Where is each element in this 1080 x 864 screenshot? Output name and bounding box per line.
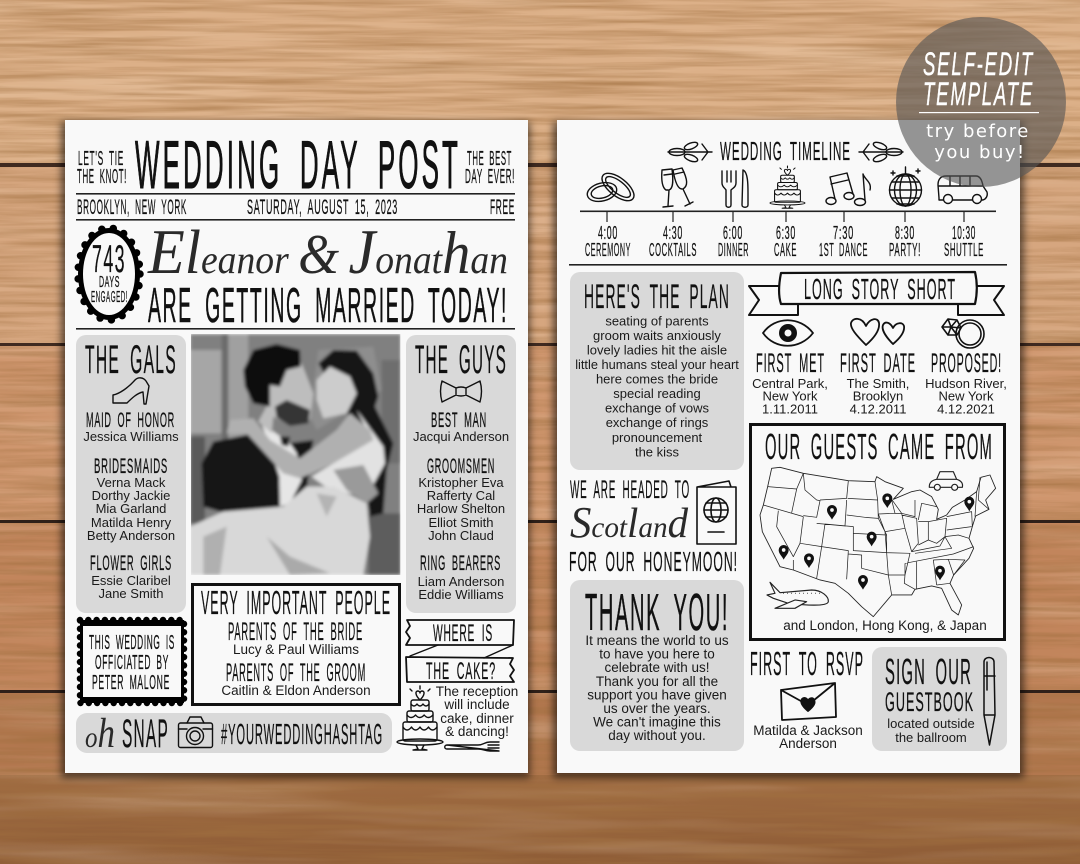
heading: wedding timeline bbox=[668, 136, 903, 166]
left card: wedding day post: THIS WEDDING IS bbox=[89, 632, 175, 654]
icon: high heel bbox=[113, 378, 149, 404]
timeline chart: 8:30 bbox=[895, 223, 915, 243]
text: reception: The reception bbox=[436, 684, 518, 699]
left card: wedding day post: PARENTS OF THE GROOM bbox=[226, 659, 366, 687]
panel: thank you: It means the world to us bbox=[585, 633, 729, 648]
panel: our guests came from bbox=[750, 424, 1004, 640]
panel: here's the plan: special reading bbox=[613, 386, 701, 401]
icon: car bbox=[929, 472, 963, 490]
banner: where is the cake: THE CAKE? bbox=[426, 658, 496, 685]
dateline: SATURDAY, AUGUST 15, 2023 bbox=[247, 196, 398, 219]
left card: wedding day post: PARENTS OF THE BRIDE bbox=[228, 618, 363, 646]
right card: timeline and story: THANK YOU! bbox=[585, 584, 729, 642]
story: first date: Brooklyn bbox=[853, 388, 903, 404]
text: THE GUYS bbox=[415, 338, 507, 382]
badge: days engaged: DAYS bbox=[99, 274, 120, 291]
story: proposed: Hudson River, bbox=[925, 376, 1007, 391]
timeline chart: 4:30 bbox=[663, 223, 683, 243]
panel: the gals: Jane Smith bbox=[98, 586, 164, 601]
right card: timeline and story bbox=[553, 120, 1024, 778]
right card: timeline and story: FOR OUR HONEYMOON! bbox=[569, 546, 738, 577]
callout: officiant: OFFICIATED BY bbox=[95, 652, 169, 674]
left card: wedding day post: MAID OF HONOR bbox=[86, 409, 175, 432]
panel: the gals: Verna Mack bbox=[97, 475, 166, 490]
heading: wedding timeline: WEDDING TIMELINE bbox=[720, 136, 851, 166]
icon: bow tie bbox=[440, 381, 482, 402]
text: reception bbox=[436, 684, 518, 739]
panel: guestbook: the ballroom bbox=[895, 730, 967, 745]
panel: the gals: BRIDESMAIDS bbox=[94, 455, 168, 478]
icon: wedding cake bbox=[397, 686, 443, 750]
story: proposed: 4.12.2021 bbox=[937, 402, 995, 416]
left card: wedding day post: #YOURWEDDINGHASHTAG bbox=[221, 719, 383, 751]
panel: very important people: Caitlin & Eldon Anderson bbox=[221, 683, 371, 698]
story: first met bbox=[752, 320, 828, 416]
masthead bbox=[77, 127, 515, 203]
pins bbox=[779, 493, 974, 590]
panel: thank you: us over the years. bbox=[603, 701, 711, 716]
panel: the gals: Matilda Henry bbox=[91, 515, 172, 530]
honeymoon text: WE ARE HEADED TO bbox=[570, 476, 690, 504]
text: reception: cake, dinner bbox=[440, 711, 514, 726]
timeline chart: SHUTTLE bbox=[944, 240, 984, 260]
left card: wedding day post bbox=[61, 120, 530, 778]
panel: the guys: Jacqui Anderson bbox=[413, 429, 509, 444]
icon: shuttle van bbox=[938, 176, 987, 204]
panel: the guys bbox=[406, 335, 516, 613]
panel: here's the plan: groom waits anxiously bbox=[593, 328, 721, 343]
panel: guestbook: located outside bbox=[887, 716, 975, 731]
story: first date: The Smith, bbox=[847, 376, 909, 391]
icon: music notes bbox=[826, 173, 870, 206]
icon: cake bbox=[770, 166, 805, 208]
badge: days engaged: 743 bbox=[92, 238, 126, 281]
panel: the guys: Elliot Smith bbox=[428, 515, 494, 530]
icon: eye bbox=[763, 320, 813, 346]
timeline chart: 7:30 bbox=[833, 223, 854, 243]
text: reception: will include bbox=[443, 697, 510, 712]
timeline chart: 4:00 bbox=[598, 223, 618, 243]
masthead: THE KNOT! bbox=[77, 166, 127, 188]
icon: airplane bbox=[767, 582, 828, 608]
panel: here's the plan: pronouncement bbox=[612, 430, 703, 445]
story: first met: Central Park, bbox=[752, 376, 828, 391]
panel: thank you: We can't imagine this bbox=[593, 715, 721, 730]
timeline chart: 1ST DANCE bbox=[819, 240, 868, 260]
honeymoon text bbox=[569, 476, 738, 577]
left card: wedding day post: VERY IMPORTANT PEOPLE bbox=[201, 584, 391, 621]
panel: here's the plan: seating of parents bbox=[605, 314, 709, 328]
panel: here's the plan: the kiss bbox=[635, 444, 680, 460]
panel: hashtag: oh bbox=[85, 711, 115, 757]
text: ARE GETTING MARRIED TODAY! bbox=[148, 279, 508, 333]
right card: timeline and story: FIRST MET bbox=[756, 348, 825, 378]
headline names: Eleanor & Jonathan bbox=[147, 216, 508, 287]
icon: camera bbox=[178, 717, 212, 748]
story: first date bbox=[840, 319, 916, 416]
badge: self-edit template bbox=[896, 17, 1066, 187]
panel: the gals: Jessica Williams bbox=[83, 429, 179, 444]
icon: passport bbox=[697, 481, 736, 544]
timeline chart: COCKTAILS bbox=[649, 240, 697, 260]
icon: champagne bbox=[662, 168, 693, 207]
panel: here's the plan: here comes the bride bbox=[596, 372, 718, 386]
panel: thank you bbox=[570, 580, 744, 751]
icon: hearts bbox=[851, 319, 904, 345]
icon: cutlery bbox=[722, 170, 748, 207]
icon: disco ball bbox=[890, 167, 922, 206]
panel: the guys: Eddie Williams bbox=[418, 587, 504, 602]
left card: wedding day post: THE BEST bbox=[467, 148, 512, 170]
dateline bbox=[77, 196, 515, 219]
banner: where is the cake: WHERE IS bbox=[433, 620, 493, 647]
panel: thank you: Thank you for all the bbox=[596, 674, 718, 689]
panel: here's the plan: exchange of vows bbox=[605, 400, 710, 416]
panel: the guys: Kristopher Eva bbox=[418, 475, 504, 490]
panel: the guys: Liam Anderson bbox=[418, 574, 504, 589]
icon: laurel right bbox=[859, 141, 903, 163]
icon: laurel left bbox=[668, 141, 712, 163]
panel: here's the plan: lovely ladies hit the aisle bbox=[587, 342, 727, 358]
story: first met: New York bbox=[763, 388, 818, 404]
panel: the gals: Essie Claribel bbox=[91, 573, 171, 588]
badge: self-edit template: try before bbox=[926, 121, 1030, 142]
panel: the gals: Dorthy Jackie bbox=[92, 488, 170, 503]
badge: self-edit template: you buy! bbox=[934, 142, 1026, 163]
story: first date: 4.12.2011 bbox=[850, 402, 906, 416]
panel: thank you: day without you. bbox=[608, 728, 706, 743]
right card: timeline and story: FIRST TO RSVP bbox=[750, 645, 864, 682]
panel: thank you: support you have given bbox=[587, 687, 727, 702]
panel: guestbook: GUESTBOOK bbox=[885, 687, 974, 717]
banner: long story short bbox=[749, 272, 1004, 315]
honeymoon text: Scotland bbox=[570, 498, 689, 547]
panel: hashtag bbox=[76, 711, 392, 757]
dateline: BROOKLYN, NEW YORK bbox=[77, 196, 187, 219]
panel: the guys: RING BEARERS bbox=[420, 552, 501, 575]
map: united states bbox=[760, 467, 996, 617]
rsvp: Matilda & Jackson bbox=[753, 723, 863, 738]
panel: guestbook bbox=[872, 647, 1007, 751]
masthead: LET'S TIE bbox=[78, 148, 124, 170]
panel: the guys: GROOMSMEN bbox=[427, 455, 495, 478]
panel: our guests came from: and London, Hong Kong, & Japan bbox=[783, 618, 987, 633]
text: WEDDING DAY POST bbox=[135, 127, 461, 203]
panel: here's the plan: little humans steal your heart bbox=[575, 357, 739, 372]
callout: officiant bbox=[80, 620, 184, 703]
timeline chart bbox=[580, 166, 996, 260]
right card: timeline and story: HERE'S THE PLAN bbox=[584, 278, 730, 316]
timeline chart: CAKE bbox=[774, 240, 797, 260]
panel: here's the plan bbox=[570, 272, 744, 470]
timeline chart: PARTY! bbox=[889, 240, 921, 260]
panel: the guys: John Claud bbox=[428, 528, 494, 543]
banner: where is the cake bbox=[406, 620, 514, 685]
panel: the gals: Betty Anderson bbox=[87, 528, 175, 543]
icon: pen bbox=[984, 658, 995, 745]
badge: days engaged bbox=[78, 228, 140, 320]
callout: officiant: PETER MALONE bbox=[92, 672, 170, 694]
rsvp bbox=[750, 645, 864, 751]
panel: very important people: Lucy & Paul Williams bbox=[233, 642, 359, 657]
panel: the guys: BEST MAN bbox=[431, 409, 487, 432]
left card: wedding day post: THE GALS bbox=[85, 338, 177, 382]
icon: fork bbox=[445, 742, 499, 751]
panel: the gals bbox=[76, 335, 186, 613]
panel: thank you: to have you here to bbox=[599, 647, 715, 662]
timeline chart: 10:30 bbox=[952, 223, 976, 243]
timeline chart: DINNER bbox=[718, 240, 749, 260]
panel: the guys: Harlow Shelton bbox=[417, 501, 505, 516]
panel: thank you: celebrate with us! bbox=[604, 660, 710, 675]
panel: very important people bbox=[192, 584, 400, 704]
story: first met: 1.11.2011 bbox=[762, 402, 818, 416]
photo: couple bbox=[190, 334, 401, 575]
story: proposed bbox=[925, 319, 1007, 416]
icon: envelope bbox=[781, 683, 836, 720]
timeline chart: 6:00 bbox=[723, 223, 743, 243]
rsvp: Anderson bbox=[779, 736, 837, 751]
icon: ring bbox=[942, 319, 984, 348]
badge: days engaged: ENGAGED! bbox=[91, 289, 128, 306]
left card: wedding day post: DAY EVER! bbox=[465, 166, 515, 188]
panel: here's the plan: exchange of rings bbox=[606, 415, 709, 430]
panel: hashtag: SNAP bbox=[122, 712, 169, 756]
icon: rings bbox=[585, 168, 639, 206]
left card: wedding day post: FREE bbox=[490, 196, 515, 219]
panel: the gals: FLOWER GIRLS bbox=[90, 552, 172, 575]
story: proposed: New York bbox=[939, 388, 994, 404]
right card: timeline and story: FIRST DATE bbox=[840, 348, 916, 378]
panel: the guys: Rafferty Cal bbox=[427, 488, 495, 503]
timeline chart: CEREMONY bbox=[585, 240, 631, 260]
panel: the gals: Mia Garland bbox=[96, 501, 166, 516]
text: reception: & dancing! bbox=[445, 724, 509, 739]
timeline chart: 6:30 bbox=[776, 223, 796, 243]
